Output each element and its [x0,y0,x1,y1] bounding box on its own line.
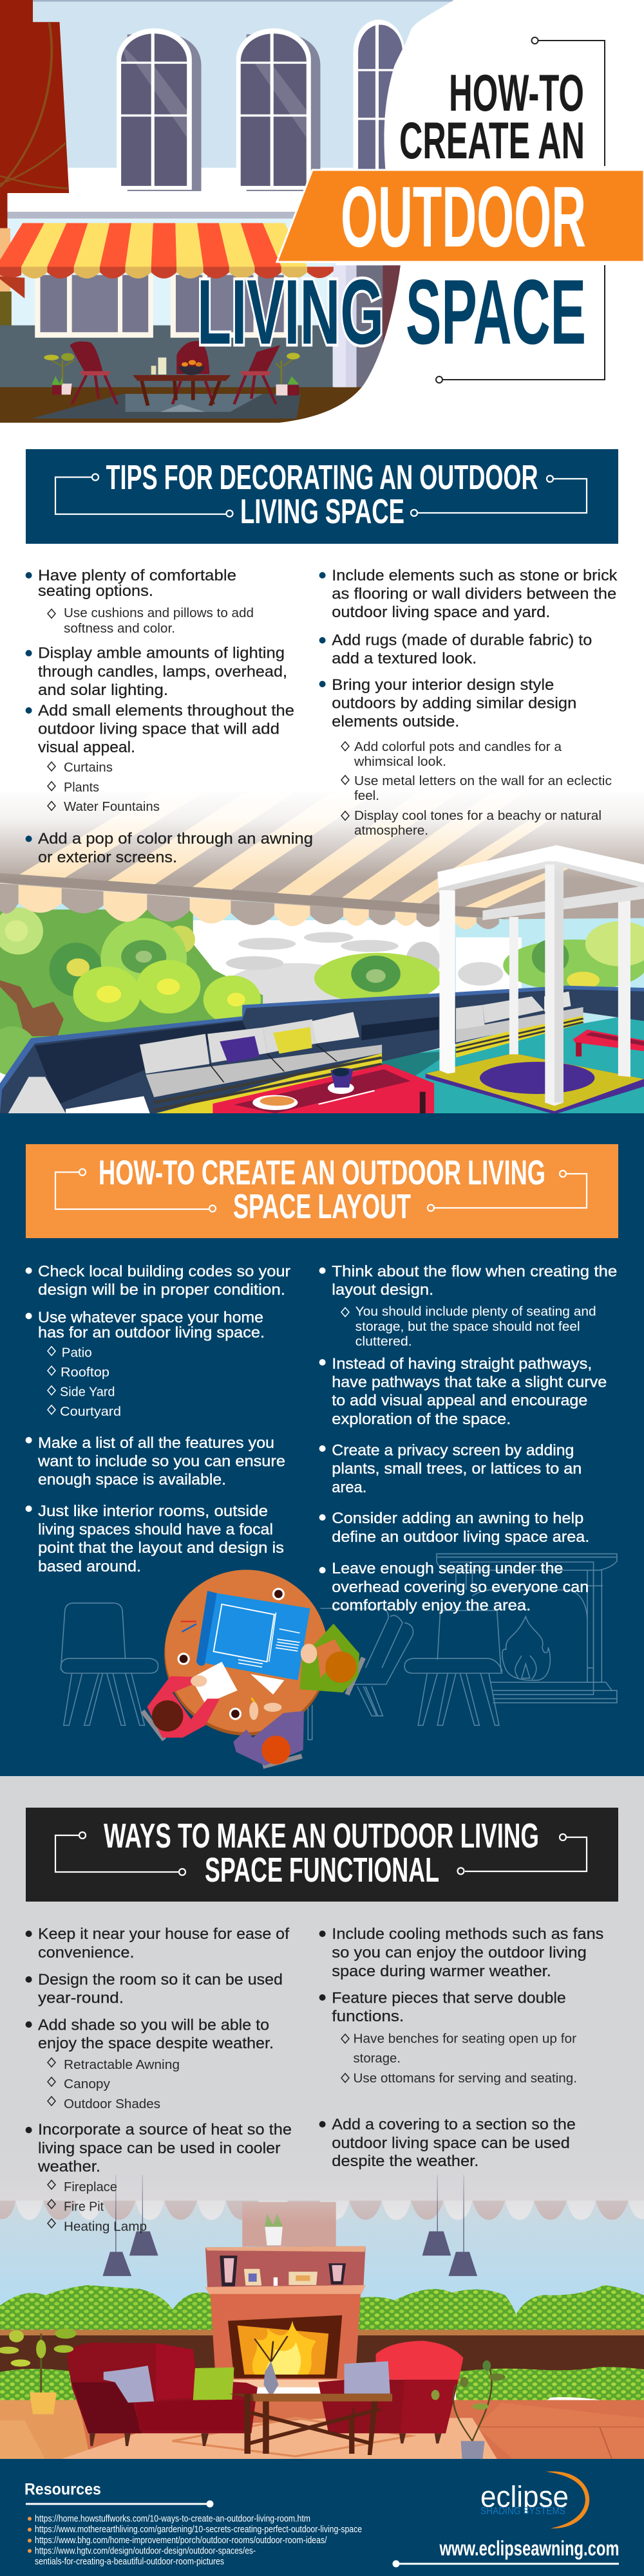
tip: seating: softness and color. [64,622,175,636]
functional tip: heat: Heating Lamp [64,2220,147,2234]
layout tip: awning [319,1510,589,1546]
tip: awning: or exterior screens. [38,849,177,866]
functional tip: covering: outdoor living space can be used [332,2135,570,2152]
line art: chairs and fireplace [61,1554,617,1739]
patio floor [0,2400,644,2460]
tips right column [319,567,618,838]
platform with purple rug [426,1053,644,1115]
layout tip: seating [319,1560,589,1614]
floor [0,387,390,423]
website rule [393,2560,619,2568]
clouds [193,920,522,1012]
tip: lighting: and solar lighting. [38,681,168,699]
hedges [0,2285,644,2330]
layout tip: building codes: Check local building codes so your [38,1263,290,1281]
tip: rugs [319,632,592,667]
lower window left [35,275,153,338]
functional tip: heat: Fire Pit [64,2200,104,2214]
white chair corner [8,1077,66,1113]
functional tip: cooling [319,1925,603,1980]
terrace wall [0,986,644,1115]
papers and pencils [181,1622,284,1705]
functional tip: shade [26,2017,274,2111]
tip: rugs: add a textured look. [332,650,477,667]
layout tip: privacy screen: plants, small trees, or lattices to an [332,1460,582,1478]
tip: small elements: Curtains [64,761,113,775]
layout tip: building codes [26,1263,290,1299]
resources list [28,2514,362,2567]
layout heading text [99,1153,545,1226]
resources list: https://www.motherearthliving.com/gardening/10-secrets-creating-perfect-outdoor-living-space [35,2525,362,2535]
sofa left [140,1012,382,1115]
tips heading text [106,458,538,531]
layout tip: focal point: living spaces should have a focal [38,1521,273,1539]
layout illustration: people planning around a table [142,1570,363,1766]
layout tip: feature list: Make a list of all the features you [38,1434,274,1452]
functional tip: covering: despite the weather. [332,2153,478,2170]
section: tips for decorating [26,449,618,544]
layout tip: building codes: design will be in proper condition. [38,1281,285,1299]
tip: small elements: Water Fountains [64,800,160,814]
functional tip: cooling: so you can enjoy the outdoor living [332,1944,587,1961]
pergola [437,845,644,1106]
layout tip: flow [319,1263,617,1349]
layout tip: pathways: to add visual appeal and encourage [332,1392,587,1409]
layout tip: feature list: enough space is available. [38,1471,226,1488]
tip: small elements: Add small elements throughout the [38,702,294,719]
layout tip: pathways: Instead of having straight pathways, [332,1355,592,1373]
functional tip: double functions: Have benches for seating open up for [353,2032,576,2046]
orange title band [277,170,644,262]
functional tip: covering [319,2116,576,2170]
layout tip: seating: comfortably enjoy the area. [332,1597,531,1614]
resources list: https://www.bhg.com/home-improvement/porch/outdoor-rooms/outdoor-room-ideas/ [35,2535,327,2546]
layout tip: pathways: have pathways that take a slight curve [332,1374,607,1391]
tip: rugs: Add rugs (made of durable fabric) to [332,632,592,649]
resources rule [26,2501,214,2507]
functional tip: heat: Fireplace [64,2180,117,2194]
tip: stone or brick: as flooring or wall dividers between the [332,586,616,602]
section: functional background [0,1776,644,2227]
cups [178,1588,285,1720]
layout tip: flow: cluttered. [355,1335,412,1349]
functional tip: shade: Retractable Awning [64,2058,180,2072]
lanterns and frames [220,2256,346,2286]
title line: living: LIVING [197,261,384,364]
tip: interior style [319,676,612,838]
tip: lighting: Display amble amounts of lighting [38,645,285,662]
sofa right [456,992,583,1057]
layout heading panel [26,1144,618,1238]
line chair right [404,1611,502,1725]
layout tip: pathways: exploration of the space. [332,1411,511,1428]
functional tip: year-round: year-round. [38,1990,124,2006]
functional tip: near house [26,1925,289,1961]
layout tip: pathways [319,1355,607,1428]
tip: awning [26,830,313,866]
functional tip: near house: convenience. [38,1944,134,1961]
functional right column [319,1925,603,2170]
person in purple [233,1702,304,1766]
tip: interior style: Display cool tones for a beachy or natural [354,809,601,823]
layout tip: flow: Think about the flow when creating the [332,1263,617,1281]
tip: lighting: through candles, lamps, overhead, [38,663,287,681]
tip: seating: Use cushions and pillows to add [64,606,254,620]
functional tip: shade: Outdoor Shades [64,2097,160,2111]
layout tip: focal point: based around. [38,1558,141,1575]
functional tip: shade: Add shade so you will be able to [38,2017,269,2034]
layout tip: feature list [26,1434,285,1488]
functional tip: double functions: Feature pieces that serve double [332,1990,566,2006]
potted plants [0,2328,505,2460]
title [197,64,644,364]
section: layout background [0,1113,644,1776]
trees [0,907,644,1076]
functional tip: cooling: Include cooling methods such as fans [332,1925,603,1943]
chimney [242,2202,336,2247]
brick wall [0,2330,644,2375]
tip: stone or brick: outdoor living space and yard. [332,604,550,621]
functional tip: heat [26,2121,292,2234]
tip: interior style: outdoors by adding similar design [332,695,576,712]
layout tip: focal point [26,1503,284,1575]
tips left column [26,567,313,866]
purple and yellow pillows [220,1027,312,1063]
ledge [0,193,336,326]
tip: small elements: Plants [64,781,99,795]
person in pink [142,1675,220,1739]
functional tip: double functions: Use ottomans for serving and seating. [353,2071,577,2086]
layout tip: feature list: want to include so you can ensure [37,1453,285,1470]
functional tip: heat: living space can be used in cooler [38,2140,281,2157]
lower hedges [0,2367,644,2411]
tip: interior style: atmosphere. [354,824,428,838]
layout tip: whatever space: Patio [62,1346,92,1360]
window 1 [117,28,202,191]
illustration: rooftop terrace under awning [0,787,644,1115]
fade to white [0,787,644,880]
resources list: sentials-for-creating-a-beautiful-outdoor-room-pictures [35,2557,224,2567]
terrace floor [205,1012,644,1115]
tips heading frame [55,474,587,517]
line fireplace [437,1554,617,1703]
resources list: https://home.howstuffworks.com/10-ways-to-create-an-outdoor-living-room.htm [35,2514,310,2524]
layout tip: focal point: Just like interior rooms, outside [38,1503,268,1520]
layout tip: whatever space [26,1309,265,1419]
window 2 [236,28,320,191]
logo arc [546,2471,589,2528]
layout tip: whatever space: has for an outdoor living space. [38,1324,265,1341]
functional tip: shade: enjoy the space despite weather. [38,2035,274,2052]
tip: interior style: feel. [354,789,379,803]
chairs [70,341,280,404]
white curved cut-out [0,0,644,432]
tip: seating [26,567,254,636]
tip: seating: Have plenty of comfortable [38,567,236,584]
right armchair [318,2340,463,2443]
tip: interior style: elements outside. [332,713,459,730]
tip: small elements: visual appeal. [38,739,135,756]
functional tip: covering: Add a covering to a section so the [332,2116,576,2133]
tip: seating: seating options. [38,582,153,600]
left sofa [67,2342,258,2446]
layout right column [319,1263,617,1614]
person in green [300,1624,363,1694]
functional heading text: SPACE FUNCTIONAL [205,1851,439,1889]
functional tip: double functions: functions. [332,2008,404,2025]
window 3 [353,19,404,171]
table with candles and fruit bowl [133,358,231,405]
layout tip: awning: define an outdoor living space area. [332,1528,589,1546]
resources list: https://www.hgtv.com/design/outdoor-design/outdoor-spaces/es- [35,2546,256,2556]
awning scallops [0,2149,644,2220]
footer background [0,2459,644,2576]
coffee table and vase [229,2336,392,2455]
layout tip: privacy screen [319,1441,582,1496]
functional left column [26,1925,292,2234]
potted plants [44,353,300,396]
footer [0,2459,644,2576]
small red table [573,1030,644,1057]
tips heading panel [26,449,618,544]
blueprint [196,1591,310,1680]
functional tip: year-round: Design the room so it can be used [38,1971,283,1988]
tip: small elements: outdoor living space that will add [38,721,279,737]
layout tip: flow: storage, but the space should not feel [355,1320,580,1334]
functional tip: heat: weather. [37,2158,100,2175]
tip: small elements [26,702,294,814]
awning [0,792,644,929]
functional heading panel [26,1808,618,1902]
title frame lines [436,37,605,383]
layout tip: seating: Leave enough seating under the [332,1560,563,1577]
tip: interior style: Bring your interior design style [332,676,554,694]
functional tip: double functions: storage. [353,2052,401,2066]
functional tip: double functions [319,1990,577,2086]
fade to grey [0,2142,644,2223]
tip: stone or brick [319,567,618,621]
lower window right [171,275,289,338]
illustration: fireplace patio [0,2142,644,2460]
functional tip: heat: Incorporate a source of heat so the [38,2121,292,2138]
layout tip: whatever space: Use whatever space your home [38,1309,263,1326]
line chair left [61,1603,158,1725]
tip: awning: Add a pop of color through an awning [38,830,313,848]
line chair middle [308,1608,413,1739]
tip: lighting [26,645,287,699]
logo tagline: SHADING SYSTEMS [480,2506,565,2517]
fireplace [205,2246,366,2387]
layout heading frame [55,1169,587,1212]
section: functional [26,1808,618,1902]
functional tip: cooling: space during warmer weather. [332,1963,551,1980]
resources heading: Resources [24,2480,101,2498]
layout tip: privacy screen: area. [332,1479,366,1496]
awning [0,223,334,299]
functional tip: year-round [26,1971,283,2006]
functional heading frame [55,1832,587,1875]
patio wall [0,326,334,387]
hero illustration: building with awning and patio [0,0,644,432]
layout tip: flow: layout design. [332,1281,433,1299]
eclipse logo [480,2471,589,2528]
tip: interior style: Add colorful pots and candles for a [354,740,562,754]
table [164,1570,328,1736]
layout tip: awning: Consider adding an awning to help [332,1510,583,1527]
functional tip: shade: Canopy [64,2077,110,2091]
layout tip: flow: You should include plenty of seating and [355,1305,596,1319]
layout tip: seating: overhead covering so everyone can [332,1579,589,1596]
hanging lamps [102,2175,477,2276]
layout tip: focal point: point that the layout and design is [38,1539,284,1557]
layout tip: whatever space: Rooftop [61,1366,109,1380]
rug [31,394,301,418]
functional tip: near house: Keep it near your house for ease of [38,1925,289,1943]
functional heading text [104,1817,539,1889]
tip: stone or brick: Include elements such as stone or brick [332,567,618,584]
tip: interior style: Use metal letters on the wall for an eclectic [354,774,612,788]
layout tip: whatever space: Courtyard [60,1405,121,1419]
tips heading text: LIVING SPACE [240,492,404,531]
layout tip: privacy screen: Create a privacy screen by adding [332,1441,574,1459]
layout tip: whatever space: Side Yard [60,1385,115,1399]
tip: interior style: whimsical look. [354,755,446,769]
logo wordmark: eclipse [480,2480,569,2514]
red coffee table [213,1064,434,1115]
column and door [333,265,406,388]
layout heading text: SPACE LAYOUT [233,1187,411,1226]
layout left column [26,1263,290,1575]
